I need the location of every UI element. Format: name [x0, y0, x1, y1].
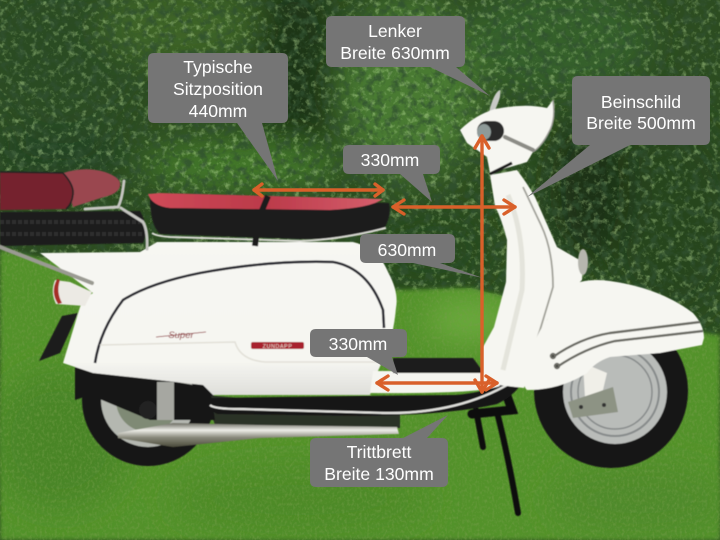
callout: leg shield — [527, 76, 710, 197]
rear wheel — [82, 334, 214, 466]
exhaust pipe — [118, 423, 399, 447]
callout: 330mm lower — [310, 329, 407, 375]
callout: 630mm — [360, 234, 483, 278]
callout: 330mm upper: 330mm — [361, 150, 419, 170]
neck collar — [490, 163, 512, 174]
callout: leg shield: Beinschild — [601, 92, 681, 112]
badge: Zündapp — [251, 342, 304, 350]
kickstand — [472, 385, 518, 513]
passenger seat — [0, 169, 120, 210]
arrow: seat to leg shield — [393, 200, 515, 214]
engine and shock absorber — [75, 367, 215, 420]
arrow: handlebar height — [475, 136, 489, 392]
luggage rack — [0, 181, 147, 283]
callout: running board — [310, 415, 448, 487]
callout: seat position — [148, 53, 288, 181]
headlight chrome ring — [533, 100, 554, 152]
callout: seat position: Sitzposition — [173, 79, 263, 99]
handlebar grip — [477, 121, 504, 141]
leg shield — [483, 170, 583, 388]
callout: handlebar — [326, 16, 490, 96]
body panel trim line — [95, 262, 384, 363]
spare tyre — [0, 211, 146, 246]
underbody shadow — [205, 395, 400, 428]
running board — [208, 367, 527, 416]
arrow: floor length — [377, 376, 497, 390]
rear body panel — [40, 242, 397, 395]
callout: handlebar: Lenker — [368, 21, 422, 41]
licence plate — [39, 313, 78, 361]
callout: leg shield: Breite 500mm — [586, 113, 696, 133]
arrow: seat length — [254, 184, 383, 196]
badge: Super — [156, 330, 206, 341]
fender chrome strips — [551, 322, 703, 368]
main seat — [148, 193, 390, 246]
scooter photo — [0, 90, 704, 513]
callout: running board: Breite 130mm — [324, 464, 434, 484]
callout: 330mm upper — [343, 145, 440, 202]
floor mat — [393, 358, 484, 373]
headset — [460, 100, 554, 173]
badge: Zündapp: ZUNDAPP — [263, 344, 292, 350]
leg shield inner shading — [503, 195, 522, 370]
callout: seat position: Typische — [183, 57, 253, 77]
callout: 630mm: 630mm — [378, 240, 436, 260]
mirror — [489, 90, 500, 112]
badge: Super: Super — [168, 330, 195, 341]
brake lever — [505, 137, 533, 150]
floor panel — [370, 371, 500, 393]
body panel crease — [100, 342, 380, 362]
front fender — [524, 280, 704, 390]
leg shield chrome trim — [523, 187, 553, 370]
background: lawn — [0, 245, 720, 540]
callout: 330mm lower: 330mm — [329, 334, 387, 354]
front wheel — [534, 314, 688, 468]
horn — [578, 249, 588, 275]
callout: handlebar: Breite 630mm — [340, 43, 450, 63]
callout: running board: Trittbrett — [347, 442, 412, 462]
callout: seat position: 440mm — [189, 101, 247, 121]
